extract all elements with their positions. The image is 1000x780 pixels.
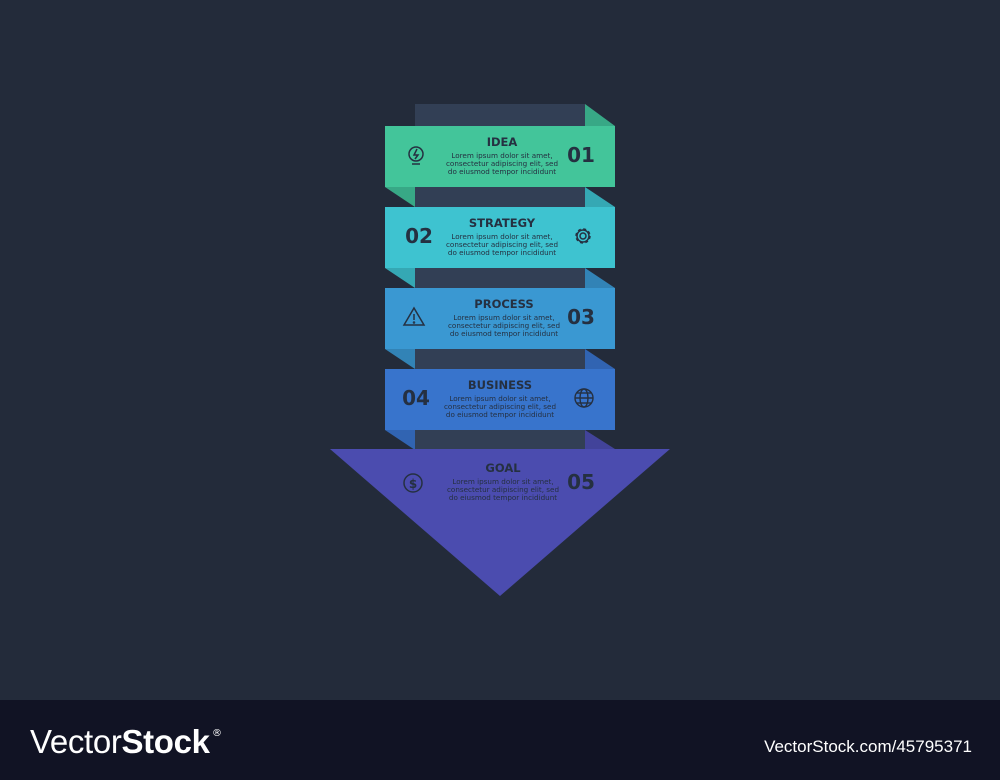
band 5: goal: Lorem ipsum dolor sit amet, [452,477,554,486]
back column [415,104,585,450]
icon: gear [576,229,590,243]
band 4: business: BUSINESS [468,378,532,392]
band 2: strategy: 02 [405,224,433,248]
icon: globe [575,389,593,407]
icon: dollar [404,474,422,492]
footer: VectorStock [30,723,211,760]
band 4: business: Lorem ipsum dolor sit amet, [449,394,551,403]
band 2: strategy: STRATEGY [469,216,536,230]
band 4: business: 04 [402,386,430,410]
band 1: idea: IDEA [487,135,517,149]
band 5: goal: consectetur adipiscing elit, sed [447,485,559,494]
band 2: strategy [385,187,615,288]
band 2: strategy: do eiusmod tempor incididunt [448,248,556,257]
fold: idea top [585,104,615,126]
band 3: process: Lorem ipsum dolor sit amet, [453,313,555,322]
band 5: goal [330,430,670,596]
band 1: idea [385,126,615,207]
band 2: strategy: Lorem ipsum dolor sit amet, [451,232,553,241]
band 5: goal: 05 [567,470,595,494]
band 4: business [385,349,615,450]
footer: ® [212,728,222,739]
footer [0,700,1000,780]
band 3: process: PROCESS [474,297,534,311]
band 3: process: do eiusmod tempor incididunt [450,329,558,338]
band 3: process: consectetur adipiscing elit, sed [448,321,560,330]
band 3: process: 03 [567,305,595,329]
band 4: business: consectetur adipiscing elit, sed [444,402,556,411]
band 1: idea: do eiusmod tempor incididunt [448,167,556,176]
band 2: strategy: consectetur adipiscing elit, sed [446,240,558,249]
band 5: goal: GOAL [485,461,521,475]
icon: dollar: $ [409,477,417,491]
icon: bulb [409,147,423,164]
band 5: goal: do eiusmod tempor incididunt [449,493,557,502]
band 1: idea: Lorem ipsum dolor sit amet, [451,151,553,160]
band 3: process [385,268,615,369]
band 1: idea: 01 [567,143,595,167]
band 4: business: do eiusmod tempor incididunt [446,410,554,419]
band 1: idea: consectetur adipiscing elit, sed [446,159,558,168]
footer: VectorStock.com/45795371 [764,737,972,756]
icon: warning [404,308,424,325]
